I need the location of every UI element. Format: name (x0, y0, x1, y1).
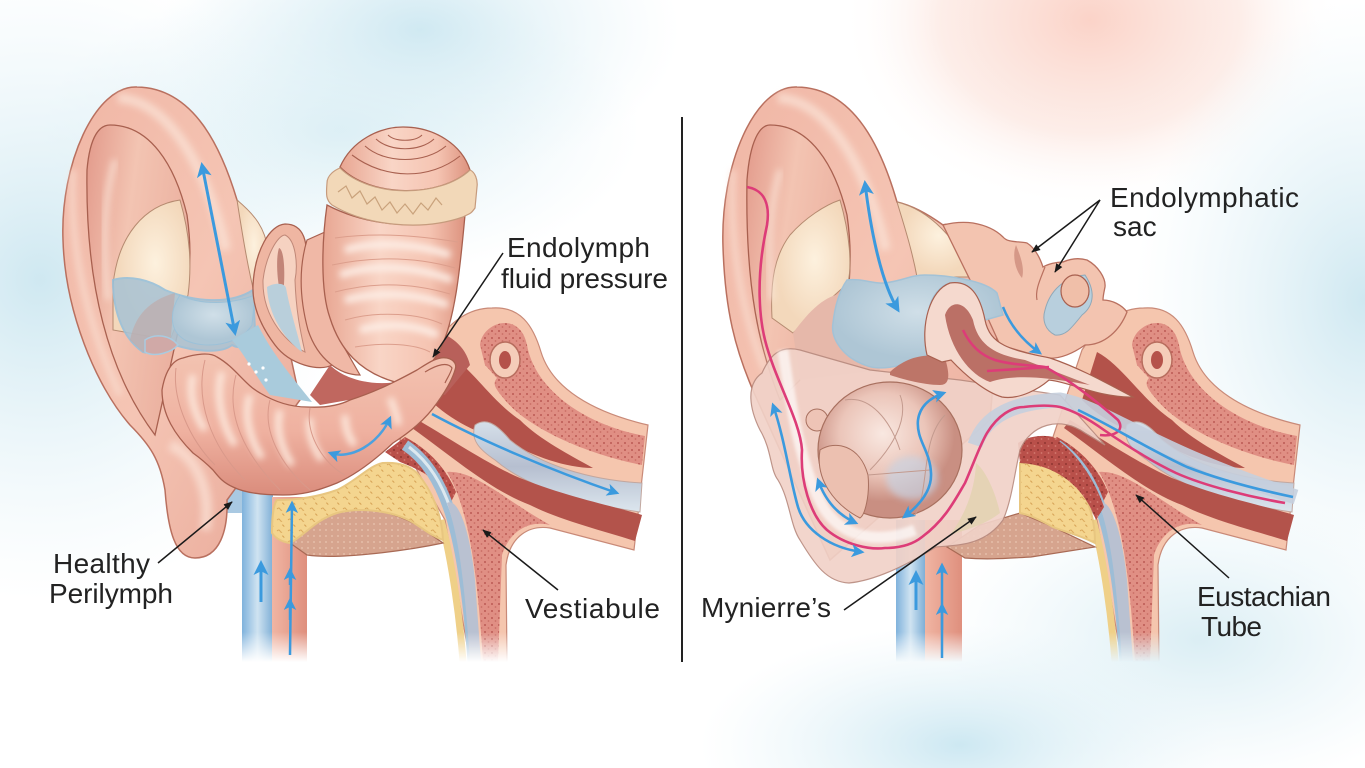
callout: Vestibule: Vestiabule (525, 593, 660, 624)
brown tissue and yellow bone (947, 436, 1104, 559)
callout: Endolymph fluid pressure (433, 232, 668, 357)
canal and vestibule layers (385, 308, 648, 662)
outer ear pinna (723, 87, 1000, 560)
callout: Mynierre's: Mynierre’s (701, 592, 831, 623)
callout: Healthy Perilymph (49, 502, 232, 609)
callout: Endolymph fluid pressure: Endolymph (507, 232, 650, 263)
callout: Endolymphatic sac: Endolymphatic (1110, 182, 1299, 213)
swollen fluid chamber (751, 349, 1296, 583)
canal and vestibule layers (1037, 308, 1300, 662)
perilymph fluid pool (113, 165, 312, 402)
callout: Vestibule (483, 530, 660, 624)
brown tissue and yellow bone (272, 463, 443, 556)
panel: healthy ear (63, 87, 648, 662)
callout: Eustachian Tube: Eustachian (1197, 581, 1331, 612)
small folded loop (253, 224, 332, 368)
callout: Endolymph fluid pressure: fluid pressure (501, 263, 668, 294)
horizontal curved tube (162, 354, 456, 495)
swollen round sac (806, 382, 962, 518)
callout: Healthy Perilymph: Perilymph (49, 578, 173, 609)
panel: Meniere's ear (723, 87, 1300, 662)
divider (681, 117, 683, 662)
callout: Eustachian Tube: Tube (1201, 611, 1262, 642)
water pool and fold (833, 275, 1133, 397)
endolymphatic sac folds (943, 222, 1127, 358)
callout: Endolymphatic sac (1032, 182, 1299, 272)
callout: Healthy Perilymph: Healthy (53, 548, 150, 579)
callout: Eustachian Tube (1136, 495, 1331, 642)
blood vessels (227, 487, 307, 662)
blood vessels (896, 520, 962, 662)
dome-topped curled tube (301, 127, 477, 405)
callout: Mynierre's (701, 517, 976, 623)
outer ear pinna (63, 87, 300, 558)
blue flow arrows (261, 414, 617, 655)
callout: Endolymphatic sac: sac (1113, 211, 1157, 242)
flow lines (747, 183, 1293, 658)
